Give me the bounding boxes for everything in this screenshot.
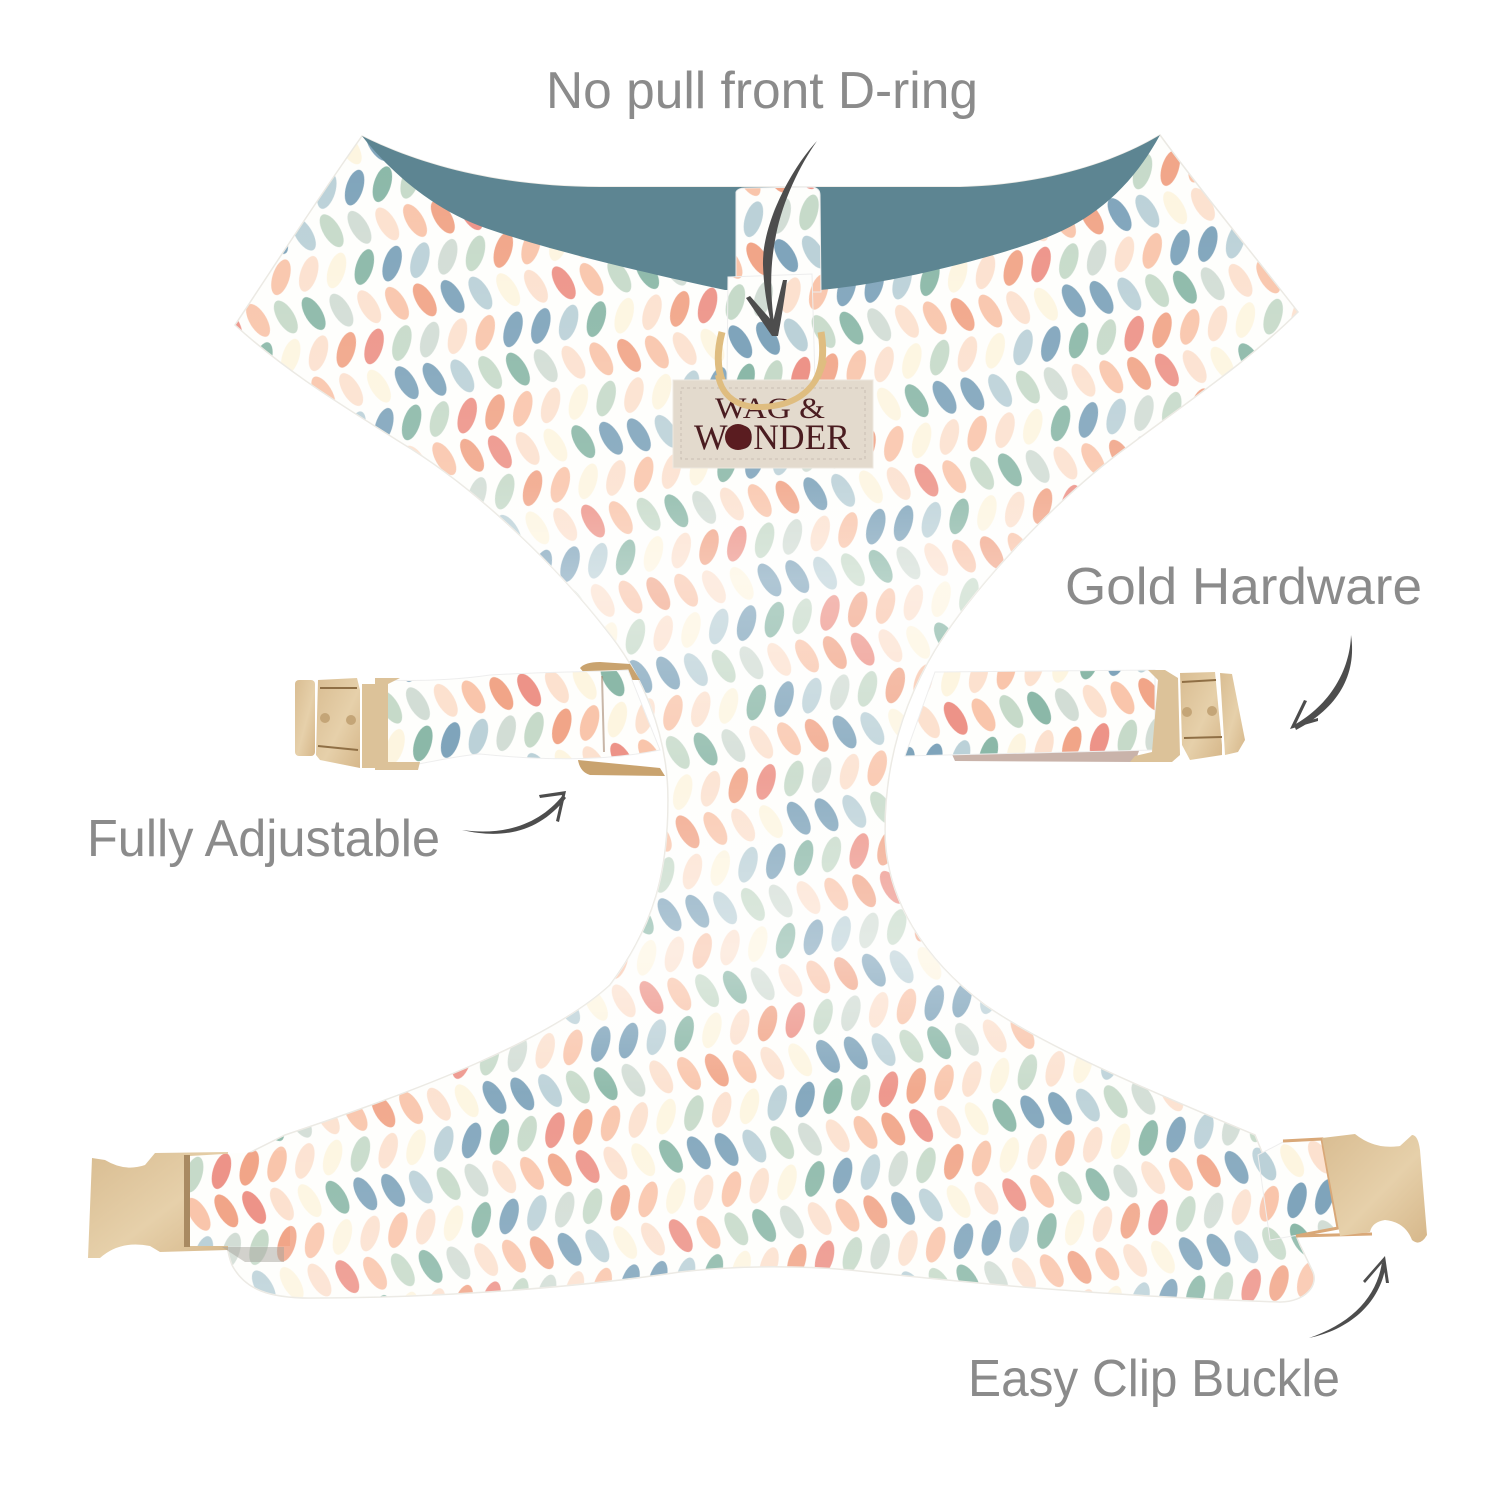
upper strap loop: [736, 187, 821, 292]
left clip buckle and strap: [88, 1150, 290, 1262]
right adjuster strap: [905, 670, 1245, 762]
arrow shaft: [1294, 635, 1352, 730]
brand text: WAG &: [715, 392, 825, 425]
brand text line 2: WONDER: [694, 417, 850, 457]
strap fabric: [905, 670, 1155, 756]
gold D-ring: [718, 332, 823, 407]
rivets: [1182, 707, 1192, 717]
rivets: [320, 713, 330, 723]
clip frame: [1283, 1139, 1372, 1236]
label stitching: [681, 388, 865, 459]
pale fade over waist and lower rows: [226, 135, 1314, 1302]
arrow shaft: [462, 795, 566, 834]
adjuster buckle: [1130, 670, 1245, 762]
D-ring tab and strap: [718, 187, 823, 407]
logo circle: [725, 424, 751, 450]
strap fabric: [385, 670, 660, 768]
buckle end bar: [1220, 673, 1245, 755]
clip frame slot: [184, 1155, 190, 1247]
label patch: [673, 380, 873, 468]
strap fabric: [1258, 1140, 1338, 1240]
arrow: gold hardware: [1290, 635, 1352, 730]
heading: Easy Clip Buckle: Easy Clip Buckle: [968, 1350, 1340, 1408]
rivet 2: [346, 715, 356, 725]
left adjuster strap: [295, 662, 665, 776]
strap fabric: [190, 1150, 290, 1246]
strap underside: [950, 748, 1140, 762]
arrow head: [1363, 1256, 1389, 1283]
brand label: [673, 360, 873, 468]
strap shadow: [222, 1247, 284, 1262]
arrow: no pull front D-ring: [746, 141, 817, 336]
lower tab: [727, 274, 815, 382]
buckle frame: [375, 678, 420, 770]
buckle slot bar: [362, 684, 376, 768]
gold ring over label: [718, 360, 824, 407]
buckle slot lines: [318, 688, 358, 750]
buckle center block: [1180, 672, 1222, 760]
right clip buckle and strap: [1258, 1134, 1427, 1243]
heading: Gold Hardware: Gold Hardware: [1065, 558, 1422, 616]
heading: No pull front D-ring: No pull front D-ring: [546, 62, 978, 120]
buckle end bar: [295, 680, 315, 756]
arrow shaft: [1309, 1262, 1386, 1338]
arrow head barbs: [746, 280, 787, 336]
clip body: [88, 1152, 228, 1258]
gold slider behind strap: [578, 662, 665, 776]
strap fold shadows: [602, 676, 604, 752]
harness body: [226, 135, 1314, 1302]
arrow head: [539, 791, 566, 822]
teal lining at neck: [362, 135, 1160, 290]
rivet 2: [1207, 706, 1217, 716]
buckle frame: [1130, 670, 1180, 762]
buckle slot lines: [1182, 680, 1222, 738]
arrow: easy clip buckle: [1309, 1256, 1389, 1338]
fabric body with watercolor dash pattern: [226, 135, 1314, 1302]
arrow shaft and head: [763, 141, 817, 323]
heading: Fully Adjustable: Fully Adjustable: [87, 810, 440, 868]
arrow head: [1290, 700, 1318, 729]
buckle center block: [316, 678, 360, 768]
adjuster buckle: [295, 678, 420, 770]
clip body: [1322, 1134, 1427, 1243]
arrow: fully adjustable: [462, 791, 566, 834]
